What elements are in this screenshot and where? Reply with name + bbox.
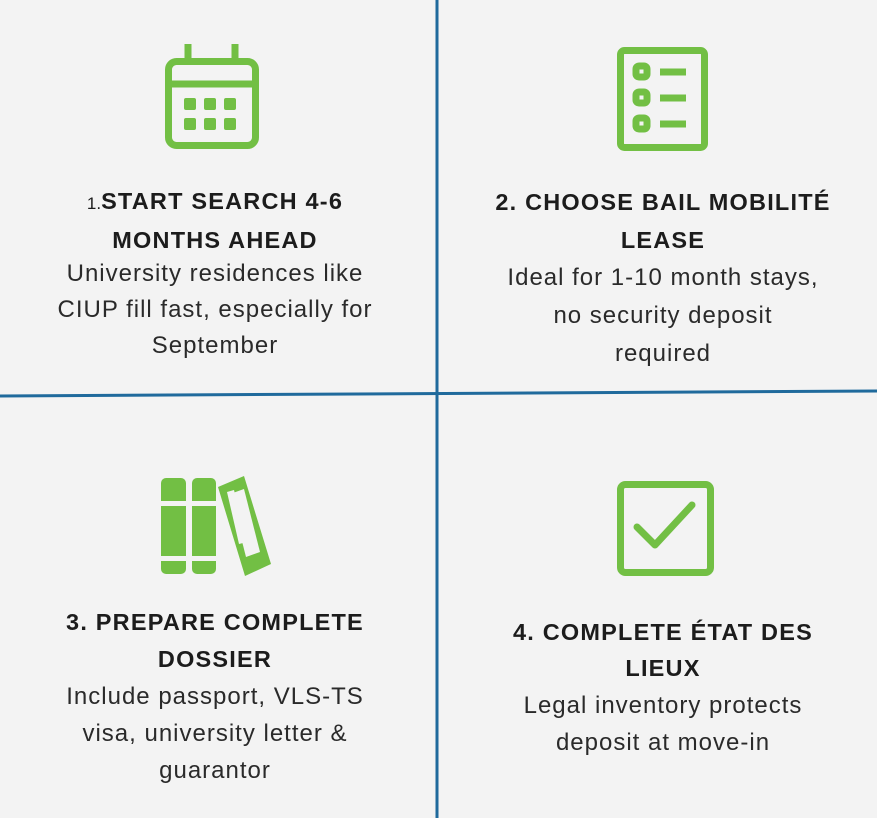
- step 1: 1.START SEARCH 4-6: [87, 188, 343, 214]
- step 1: MONTHS AHEAD: [112, 227, 318, 253]
- step 1: September: [152, 332, 278, 359]
- step 3: DOSSIER: [158, 646, 272, 672]
- step 4: LIEUX: [625, 655, 701, 681]
- icon: books: [161, 476, 271, 576]
- step 2: LEASE: [621, 227, 705, 253]
- step 1: CIUP fill fast, especially for: [58, 296, 372, 323]
- step 3: visa, university letter &: [82, 720, 348, 747]
- step 2: no security deposit: [553, 302, 773, 329]
- icon: calendar: [168, 44, 256, 146]
- step 4: 4. COMPLETE ÉTAT DES: [513, 619, 813, 645]
- step 4: [513, 619, 813, 756]
- step 2: required: [615, 340, 711, 367]
- step 2: [495, 189, 831, 367]
- step 3: [66, 609, 364, 784]
- step 1: University residences like: [67, 260, 363, 287]
- step 3: 3. PREPARE COMPLETE: [66, 609, 364, 635]
- step 4: Legal inventory protects: [524, 692, 802, 719]
- icon: checkbox: [620, 484, 710, 572]
- icon: checklist: [620, 50, 704, 148]
- step 4: deposit at move-in: [556, 729, 770, 756]
- step 2: Ideal for 1-10 month stays,: [507, 264, 819, 291]
- step 3: guarantor: [159, 757, 271, 784]
- step 1: [58, 188, 372, 359]
- step 2: 2. CHOOSE BAIL MOBILITÉ: [495, 189, 831, 215]
- step 3: Include passport, VLS-TS: [66, 683, 364, 710]
